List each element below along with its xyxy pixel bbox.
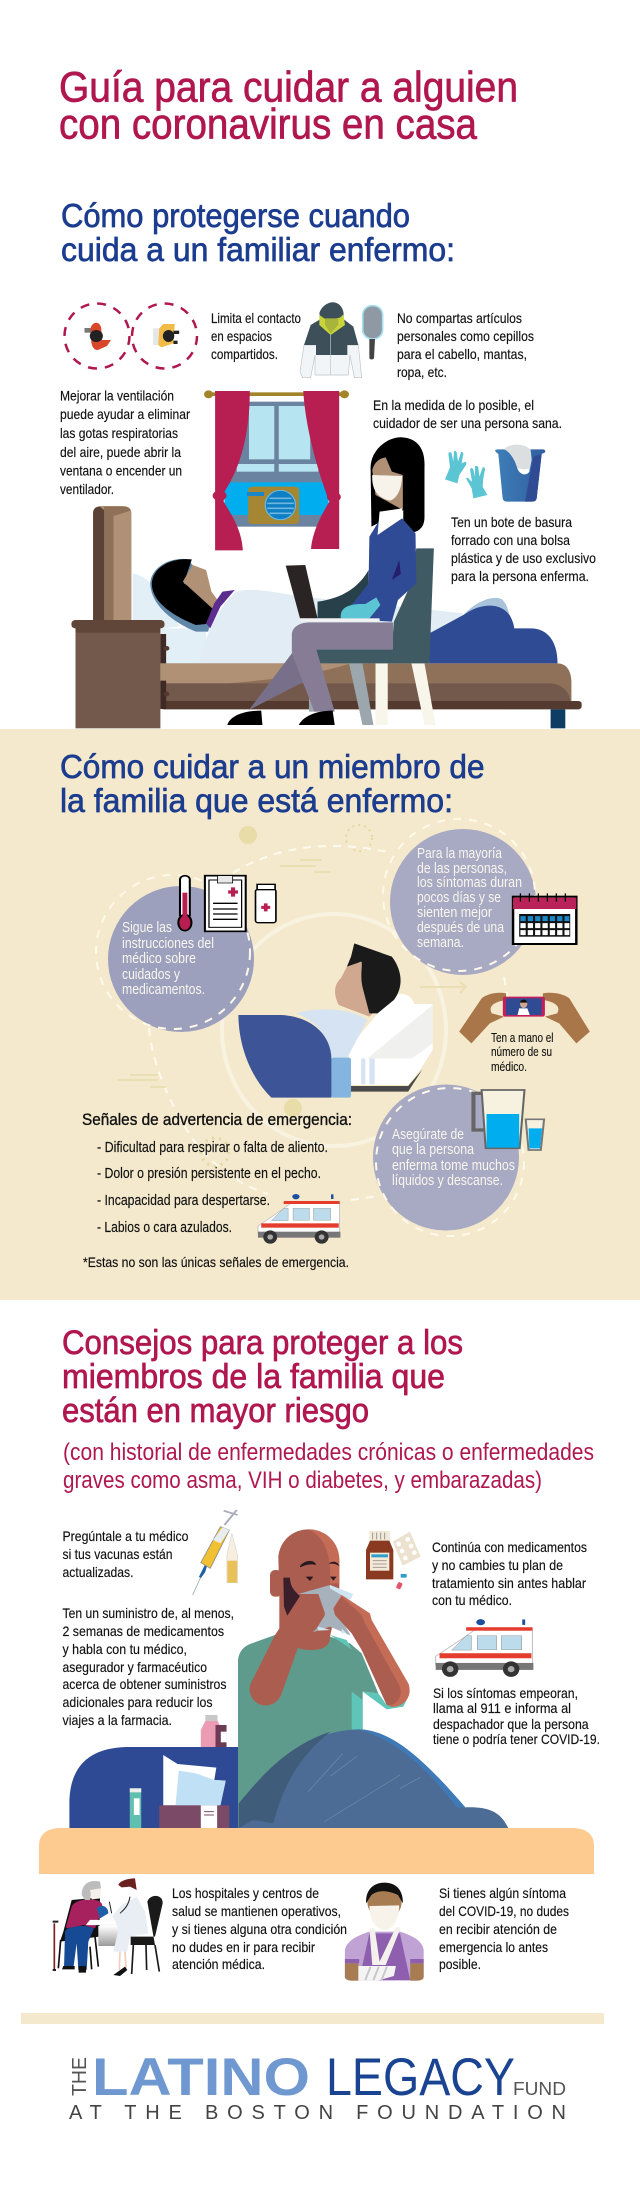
- text: seek emergency care: posible.: [439, 1956, 481, 1972]
- circle: symptoms last a few days: sienten mejor: [417, 905, 492, 921]
- illustration: sick person in bed with caregiver: [71, 437, 582, 728]
- text: hospitals remain open: Los hospitales y centros de: [172, 1885, 319, 1901]
- circle: follow doctor's instructions: medicamentos.: [122, 982, 205, 998]
- text: do not share items: para el cabello, mantas,: [397, 346, 527, 362]
- text: emergency warning signs: - Labios o cara azulados.: [97, 1219, 232, 1236]
- circle: drink fluids and rest: líquidos y descanse.: [392, 1173, 503, 1189]
- text: limit contact: [211, 310, 301, 362]
- logo: The Latino Legacy Fund at The Boston Foundation: LATINO: [92, 2048, 310, 2107]
- heading: caring for family member: [60, 748, 484, 819]
- heading: protect yourself: Cómo protegerse cuando: [61, 197, 410, 234]
- text: ventilation: ventilador.: [60, 481, 114, 497]
- logo: The Latino Legacy Fund at The Boston Foundation: AT THE BOSTON FOUNDATION: [69, 2102, 566, 2124]
- circle: drink fluids and rest: enferma tome muchos: [392, 1158, 515, 1174]
- icon: man with mask and sling: [345, 1883, 424, 1981]
- text: keep doctor's number handy: [491, 1031, 554, 1074]
- text: two weeks of medicine: adicionales para reducir los: [62, 1694, 212, 1710]
- chair: [309, 548, 436, 725]
- subheading: chronic conditions: [63, 1439, 594, 1494]
- text: keep doctor's number handy: número de su: [491, 1045, 552, 1059]
- text: emergency warning signs: - Dificultad para respirar o falta de aliento.: [97, 1139, 328, 1156]
- text: if symptoms worsen: despachador que la persona: [433, 1716, 589, 1732]
- icon: gloves and trash can: [445, 445, 545, 502]
- text: ask about vaccines: Pregúntale a tu médico: [62, 1528, 189, 1544]
- text: lined trash can: plástica y de uso exclusivo: [451, 550, 596, 566]
- orange table band: [39, 1828, 594, 1874]
- heading: protect yourself: cuida a un familiar enfermo:: [61, 231, 455, 268]
- text: lined trash can: para la persona enferma.: [451, 568, 589, 584]
- title: Guía para cuidar a alguien: [59, 64, 518, 112]
- text: two weeks of medicine: [62, 1605, 234, 1728]
- text: hospitals remain open: y si tienes alguna otra condición: [172, 1921, 347, 1937]
- logo: The Latino Legacy Fund at The Boston Foundation: FUND: [513, 2079, 566, 2099]
- circle: follow doctor's instructions: cuidados y: [122, 967, 181, 983]
- text: continue medication: Continúa con medicamentos: [432, 1539, 587, 1555]
- circle: symptoms last a few days: semana.: [417, 935, 464, 951]
- text: ventilation: puede ayudar a eliminar: [60, 406, 190, 422]
- text: two weeks of medicine: acerca de obtener suministros: [62, 1676, 226, 1692]
- heading: protect yourself: [61, 197, 455, 268]
- text: if symptoms worsen: tiene o podría tener COVID-19.: [433, 1731, 600, 1747]
- decorative background ring, dots and dashed path: [118, 825, 508, 1200]
- illustration: sick man resting in bed: [238, 943, 433, 1098]
- text: keep doctor's number handy: médico.: [491, 1060, 527, 1074]
- text: continue medication: con tu médico.: [432, 1592, 512, 1608]
- heading: protect those at higher risk: Consejos para proteger a los: [62, 1324, 463, 1362]
- icon: ambulance: [436, 1619, 533, 1677]
- text: emergency warning signs: [82, 1111, 352, 1270]
- text: do not share items: [397, 310, 534, 380]
- text: limit contact: Limita el contacto: [211, 310, 301, 326]
- text: hospitals remain open: [172, 1885, 347, 1972]
- text: ventilation: Mejorar la ventilación: [60, 388, 174, 404]
- icon: water pitcher and glass: [473, 1090, 544, 1150]
- blue blanket: [429, 598, 558, 663]
- heading: protect those at higher risk: están en mayor riesgo: [62, 1392, 369, 1430]
- logo: The Latino Legacy Fund at The Boston Foundation: LEGACY: [326, 2048, 515, 2107]
- icon: ambulance: [258, 1194, 340, 1244]
- circle: follow doctor's instructions: médico sobre: [122, 951, 196, 967]
- icon: calendar: [513, 893, 576, 944]
- man upper body: [233, 1529, 410, 1853]
- text: emergency warning signs: *Estas no son las únicas señales de emergencia.: [83, 1254, 349, 1270]
- text: if symptoms worsen: llama al 911 e informa al: [433, 1700, 571, 1716]
- bed frame: [160, 663, 582, 728]
- panel: caring for a sick family member: [0, 729, 640, 1300]
- text: two weeks of medicine: 2 semanas de medicamentos: [62, 1623, 224, 1639]
- text: do not share items: personales como cepillos: [397, 328, 534, 344]
- caregiver with mask and laptop: [227, 437, 425, 725]
- icons: thermometer, clipboard and medicine bottle: [178, 876, 276, 931]
- nightstand: [71, 620, 169, 728]
- text: seek emergency care: del COVID-19, no dudes: [439, 1903, 569, 1919]
- text: seek emergency care: Si tienes algún síntoma: [439, 1885, 566, 1901]
- text: emergency warning signs: - Dolor o presión persistente en el pecho.: [97, 1165, 321, 1182]
- circle: drink fluids and rest: que la persona: [392, 1142, 475, 1158]
- text: two weeks of medicine: y habla con tu médico,: [62, 1641, 187, 1657]
- text: healthy caregiver: En la medida de lo posible, el: [373, 397, 534, 413]
- circle: drink fluids and rest: [373, 1084, 524, 1236]
- subheading: chronic conditions: graves como asma, VIH o diabetes, y embarazadas): [63, 1467, 542, 1494]
- bed headboard: [93, 506, 131, 620]
- text: two weeks of medicine: Ten un suministro de, al menos,: [62, 1605, 234, 1621]
- text: hospitals remain open: no dudes en ir para recibir: [172, 1939, 315, 1955]
- text: seek emergency care: en recibir atención de: [439, 1921, 557, 1937]
- circle: drink fluids and rest: Asegúrate de: [392, 1127, 464, 1143]
- title: con coronavirus en casa: [59, 100, 477, 148]
- text: two weeks of medicine: viajes a la farmacia.: [62, 1712, 172, 1728]
- circle: follow doctor's instructions: [96, 875, 254, 1032]
- text: if symptoms worsen: [433, 1685, 600, 1747]
- pillow and sheets: [133, 573, 206, 663]
- logo: The Latino Legacy Fund at The Boston Foundation: [69, 2048, 566, 2124]
- icon: medicine bottle and pills: [366, 1531, 421, 1590]
- text: ventilation: del aire, puede abrir la: [60, 444, 181, 460]
- text: emergency warning signs: Señales de advertencia de emergencia:: [82, 1111, 352, 1129]
- text: healthy caregiver: [373, 397, 562, 431]
- heading: caring for family member: la familia que está enfermo:: [60, 782, 453, 819]
- icon: jacket and hairbrush: [300, 302, 383, 378]
- text: limit contact: en espacios: [211, 328, 272, 344]
- circle: follow doctor's instructions: instrucciones del: [122, 936, 214, 952]
- circle: follow doctor's instructions: Sigue las: [122, 920, 172, 936]
- circle: symptoms last a few days: Para la mayoría: [417, 846, 503, 862]
- text: hospitals remain open: atención médica.: [172, 1956, 265, 1972]
- text: limit contact: compartidos.: [211, 346, 278, 362]
- circle: symptoms last a few days: después de una: [417, 920, 505, 936]
- illustration: man sneezing into tissue on couch: [69, 1529, 508, 1853]
- text: continue medication: y no cambies tu plan de: [432, 1557, 563, 1573]
- title: [59, 64, 518, 148]
- text: ask about vaccines: actualizadas.: [62, 1564, 134, 1580]
- icon: elderly patient with doctor: [53, 1878, 163, 1976]
- text: do not share items: No compartas artículos: [397, 310, 522, 326]
- icon: syringe and ampoule: [193, 1510, 238, 1595]
- text: two weeks of medicine: asegurador y farmacéutico: [62, 1659, 207, 1675]
- icon: two people keeping distance: [64, 304, 197, 368]
- couch and pink bottle: [69, 1715, 238, 1828]
- text: if symptoms worsen: Si los síntomas empeoran,: [433, 1685, 578, 1701]
- text: keep doctor's number handy: Ten a mano el: [491, 1031, 554, 1045]
- heading: protect those at higher risk: miembros de la familia que: [62, 1358, 445, 1396]
- text: lined trash can: forrado con una bolsa: [451, 532, 570, 548]
- text: seek emergency care: [439, 1885, 569, 1972]
- text: emergency warning signs: - Incapacidad para despertarse.: [97, 1192, 270, 1209]
- circle: symptoms last a few days: los síntomas duran: [417, 875, 522, 891]
- text: continue medication: tratamiento sin antes hablar: [432, 1575, 586, 1591]
- heading: protect those at higher risk: [62, 1324, 463, 1430]
- text: ask about vaccines: [62, 1528, 189, 1580]
- text: do not share items: ropa, etc.: [397, 364, 447, 380]
- text: hospitals remain open: salud se mantienen operativos,: [172, 1903, 341, 1919]
- text: ventilation: ventana o encender un: [60, 463, 182, 479]
- text: lined trash can: Ten un bote de basura: [451, 514, 572, 530]
- circle: symptoms last a few days: [383, 819, 536, 975]
- text: healthy caregiver: cuidador de ser una persona sana.: [373, 415, 562, 431]
- text: seek emergency care: emergencia lo antes: [439, 1939, 548, 1955]
- circle: symptoms last a few days: de las personas,: [417, 861, 507, 877]
- icon: hands holding phone: [459, 993, 590, 1043]
- icon: window with curtains and air conditioner: [204, 390, 349, 550]
- text: ask about vaccines: si tus vacunas están: [62, 1546, 172, 1562]
- sick person: [150, 559, 235, 632]
- heading: caring for family member: Cómo cuidar a un miembro de: [60, 748, 484, 785]
- blanket, vial and tissue box: [130, 1729, 508, 1829]
- text: ventilation: las gotas respiratorias: [60, 425, 178, 441]
- white blanket: [199, 590, 463, 663]
- text: continue medication: [432, 1539, 587, 1608]
- text: ventilation: [60, 388, 190, 497]
- logo: The Latino Legacy Fund at The Boston Foundation: THE: [69, 2057, 91, 2096]
- circle: symptoms last a few days: pocos días y se: [417, 890, 501, 906]
- text: lined trash can: [451, 514, 596, 584]
